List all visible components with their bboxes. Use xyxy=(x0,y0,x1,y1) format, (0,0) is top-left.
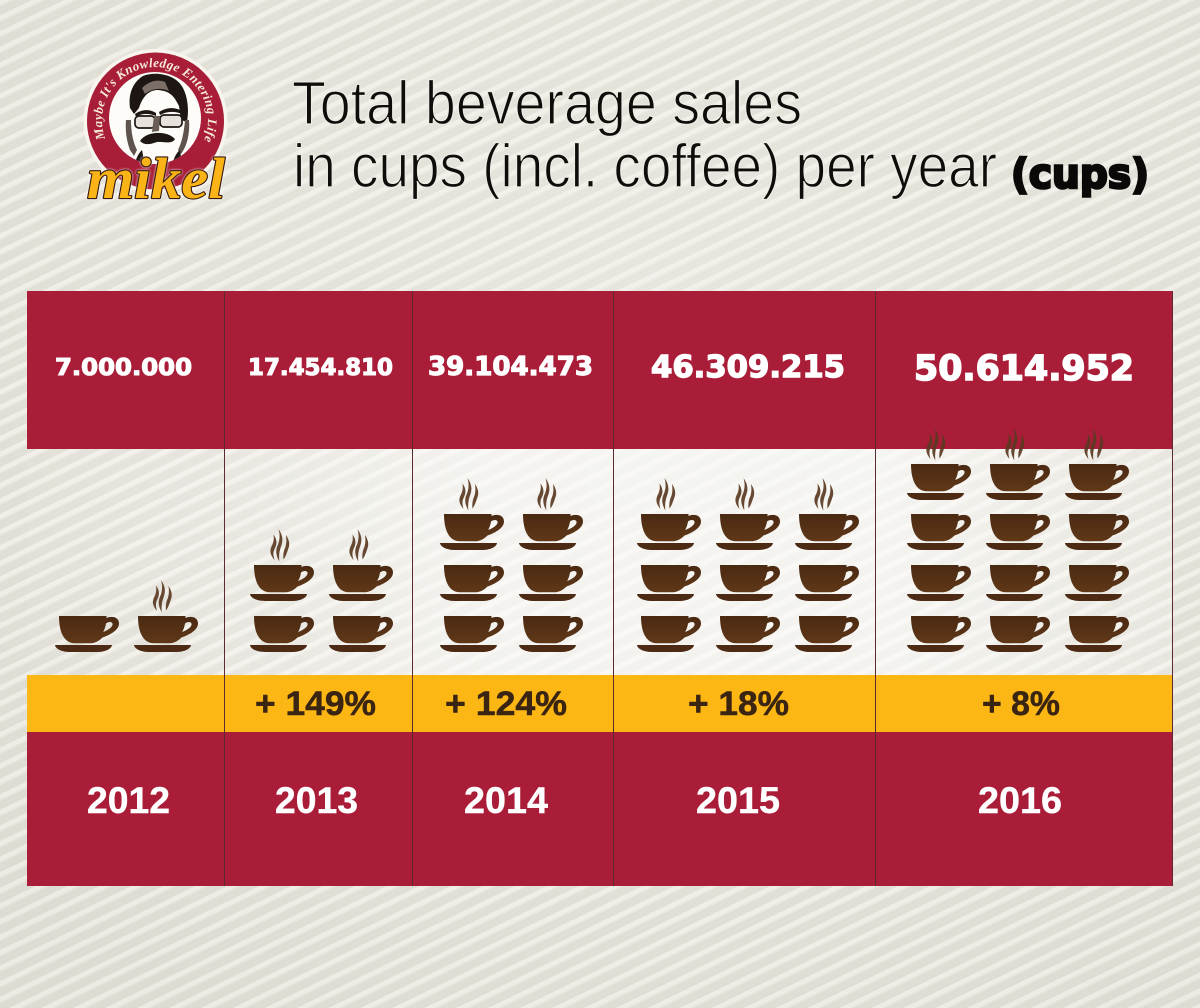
year labels: 2015 xyxy=(696,780,780,821)
year labels: 2016 xyxy=(978,780,1062,821)
growth percentages: + 8% xyxy=(982,685,1060,723)
logo: Mikel xyxy=(84,49,228,211)
cups 2016 xyxy=(907,428,1129,652)
totals per year: 46.309.215 xyxy=(651,350,845,385)
growth percentages: + 149% xyxy=(255,685,376,723)
band: cups area xyxy=(27,449,1172,675)
wordmark: mikel xyxy=(87,146,226,211)
cups 2012 xyxy=(55,580,198,652)
year labels xyxy=(87,780,1062,821)
growth percentages: + 18% xyxy=(688,685,789,723)
band: totals xyxy=(27,291,1172,449)
title xyxy=(292,69,997,200)
band: growth xyxy=(27,675,1172,732)
title: in cups (incl. coffee) per year xyxy=(293,132,997,200)
table xyxy=(27,291,1172,886)
portrait xyxy=(126,74,189,165)
band: years xyxy=(27,732,1172,886)
totals per year: 39.104.473 xyxy=(428,352,593,382)
cups 2013 xyxy=(250,529,393,652)
year labels: 2013 xyxy=(275,780,358,821)
totals per year xyxy=(55,349,1134,389)
totals per year: 7.000.000 xyxy=(55,355,192,381)
totals per year: 17.454.810 xyxy=(248,355,393,381)
growth percentages: + 124% xyxy=(445,685,567,723)
year labels: 2012 xyxy=(87,780,170,821)
totals per year: 50.614.952 xyxy=(914,349,1134,389)
cups 2015 xyxy=(637,478,859,652)
title: Total beverage sales xyxy=(292,69,802,137)
year labels: 2014 xyxy=(464,780,548,821)
growth percentages xyxy=(255,685,1060,723)
ring motto: Maybe It's Knowledge Entering Life xyxy=(94,58,217,142)
title unit: cups: (cups) xyxy=(1011,150,1149,198)
cups 2014 xyxy=(440,478,583,652)
